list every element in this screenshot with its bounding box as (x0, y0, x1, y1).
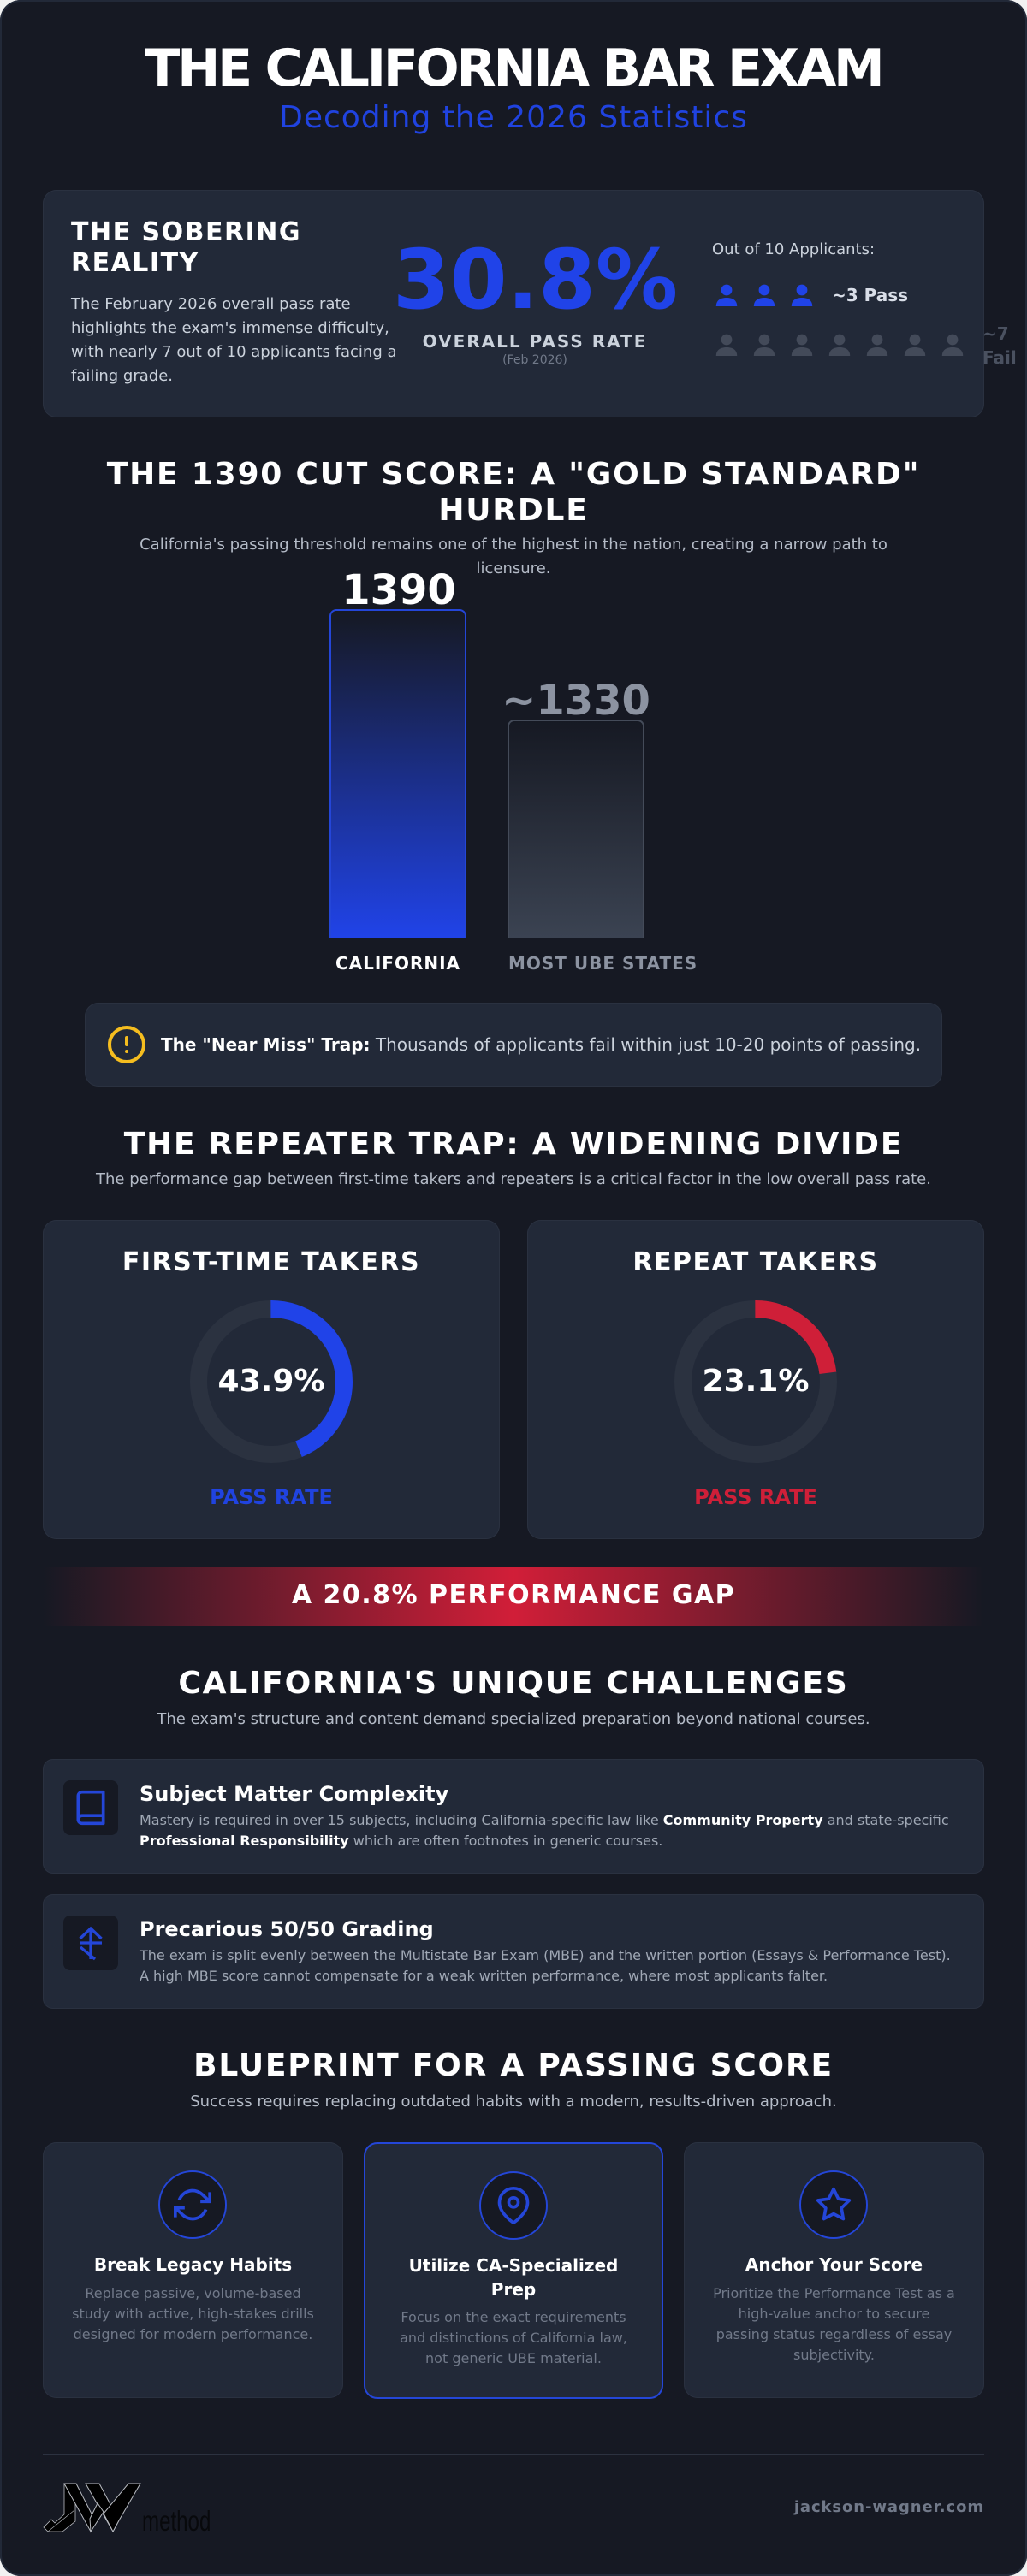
text: sobering reality description: with nearly 7 out of 10 applicants facing a (71, 343, 397, 361)
icon: map pin (479, 2171, 548, 2240)
text: challenges description: The exam's structure and content demand specialized preparation beyond national courses. (157, 1710, 870, 1728)
text: break legacy description: Replace passive, volume-based (85, 2285, 301, 2301)
heading: the repeater trap: THE REPEATER TRAP: A WIDENING DIVIDE (124, 1127, 903, 1162)
heading: utilize ca-specialized prep: Utilize CA-Specialized (409, 2255, 618, 2276)
label: feb 2026: (Feb 2026) (502, 353, 567, 367)
heading: the 1390 cut score: HURDLE (438, 493, 589, 528)
bar chart: cut score comparison (329, 566, 698, 974)
panel: first-time takers (43, 1220, 500, 1539)
icon: book (63, 1780, 118, 1835)
value: 43.9%: 43.9% (218, 1364, 324, 1399)
text: sobering reality description: failing grade. (71, 367, 173, 385)
donut chart: 23.1% (674, 1300, 837, 1463)
heading: first-time takers: FIRST-TIME TAKERS (122, 1247, 420, 1277)
heading: repeat takers: REPEAT TAKERS (632, 1247, 879, 1277)
heading: anchor your score: Anchor Your Score (745, 2254, 923, 2275)
text: utilize description (400, 2309, 627, 2366)
icon: scale (63, 1916, 118, 1970)
value: 1390: 1390 (341, 566, 456, 614)
text: cut score description (140, 536, 887, 577)
text: sobering reality description: The February 2026 overall pass rate (71, 295, 351, 313)
text: anchor description: passing status regardless of essay (716, 2326, 952, 2342)
banner: performance gap (43, 1567, 984, 1626)
bar: california (329, 609, 466, 938)
label: about 7 fail: ~7 (982, 323, 1009, 344)
heading: the sobering reality (71, 217, 301, 278)
text: sobering reality description: highlights the exam's immense difficulty, (71, 319, 389, 337)
label: most ube states: MOST UBE STATES (508, 953, 698, 974)
icon: alert circle (108, 1026, 145, 1063)
value: 23.1%: 23.1% (703, 1364, 809, 1399)
heading: the sobering reality: THE SOBERING (71, 217, 301, 247)
callout: near miss trap (85, 1003, 942, 1087)
text: utilize description: not generic UBE material. (425, 2350, 602, 2366)
text: break legacy description: designed for modern performance. (74, 2326, 312, 2342)
text: grading description (139, 1947, 951, 1984)
heading: the 1390 cut score (106, 457, 920, 528)
text: grading description: A high MBE score cannot compensate for a weak written performance, where most applicants falter. (140, 1968, 828, 1984)
label: california: CALIFORNIA (335, 953, 460, 974)
icon: refresh (158, 2170, 227, 2239)
text: subject matter description: Mastery is required in over 15 subjects, including California-specific law like Community Property and state-specific (140, 1812, 949, 1828)
heading: the sobering reality: REALITY (71, 248, 199, 278)
heading: california's unique challenges: CALIFORNIA'S UNIQUE CHALLENGES (178, 1666, 849, 1701)
heading: the 1390 cut score: THE 1390 CUT SCORE: A "GOLD STANDARD" (107, 457, 920, 492)
label: overall pass rate: OVERALL PASS RATE (423, 331, 647, 352)
heading: precarious grading: Precarious 50/50 Grading (140, 1917, 434, 1941)
panel: subject matter complexity (43, 1759, 984, 1874)
icon: star (799, 2170, 868, 2239)
logo mark (43, 2483, 141, 2532)
text: utilize description: Focus on the exact requirements (401, 2309, 626, 2325)
text: cut score description: licensure. (477, 560, 550, 577)
stat: 30.8% pass rate: 30.8% (393, 232, 678, 328)
logo wordmark: method (142, 2505, 211, 2536)
panel: repeat takers (527, 1220, 984, 1539)
icons: seven failing applicants (715, 334, 964, 356)
panel: break legacy habits (43, 2142, 343, 2398)
heading: subject matter complexity: Subject Matter Complexity (140, 1782, 448, 1806)
text: sobering reality description (70, 295, 397, 385)
text: anchor description: subjectivity. (793, 2347, 875, 2363)
text: near miss message: The "Near Miss" Trap: Thousands of applicants fail within just 10-20 points of passing. (161, 1034, 921, 1055)
heading: blueprint for a passing score: BLUEPRINT FOR A PASSING SCORE (193, 2048, 834, 2083)
label: out of 10 applicants: Out of 10 Applicants: (712, 240, 875, 258)
label: about 7 fail (982, 323, 1017, 368)
panel: the sobering reality (43, 190, 984, 417)
text: anchor description: high-value anchor to secure (739, 2306, 929, 2322)
panel: anchor your score (684, 2142, 984, 2398)
text: grading description: The exam is split evenly between the Multistate Bar Exam (MBE) and the written portion (Essays & Performance Test). (140, 1947, 951, 1963)
bar: most ube states (508, 720, 644, 938)
value: about 1330: ~1330 (502, 677, 650, 725)
text: blueprint description: Success requires replacing outdated habits with a modern, results-driven approach. (190, 2093, 837, 2111)
text: repeater trap description: The performance gap between first-time takers and repeaters is a critical factor in the low overall pass rate. (96, 1170, 931, 1188)
panel: precarious 50/50 grading (43, 1894, 984, 2009)
title: THE CALIFORNIA BAR EXAM (145, 38, 882, 98)
text: subject matter description: Professional Responsibility which are often footnotes in generic courses. (140, 1833, 662, 1849)
text: anchor description (713, 2285, 955, 2363)
text: cut score description: California's passing threshold remains one of the highest in the nation, creating a narrow path to (140, 536, 887, 554)
label: pass rate: PASS RATE (210, 1485, 333, 1509)
label: pass rate: PASS RATE (694, 1485, 817, 1509)
heading: break legacy habits: Break Legacy Habits (94, 2254, 292, 2275)
text: break legacy description (72, 2285, 314, 2342)
footer: website: jackson-wagner.com (794, 2498, 984, 2516)
logo: jw method (43, 2483, 211, 2536)
heading: utilize ca-specialized prep: Prep (491, 2279, 536, 2300)
panel: utilize ca-specialized prep (364, 2142, 663, 2399)
label: about 3 pass: ~3 Pass (832, 285, 908, 305)
text: subject matter description (140, 1812, 949, 1849)
text: break legacy description: study with active, high-stakes drills (72, 2306, 314, 2322)
subtitle: Decoding the 2026 Statistics (279, 100, 748, 135)
label: about 7 fail: Fail (982, 347, 1017, 368)
donut chart: 43.9% (190, 1300, 353, 1463)
heading: utilize ca-specialized prep (409, 2255, 618, 2300)
text: utilize description: and distinctions of California law, (400, 2330, 627, 2346)
text: performance gap: A 20.8% PERFORMANCE GAP (292, 1580, 735, 1610)
text: anchor description: Prioritize the Performance Test as a (713, 2285, 955, 2301)
icons: three passing applicants (715, 284, 813, 306)
